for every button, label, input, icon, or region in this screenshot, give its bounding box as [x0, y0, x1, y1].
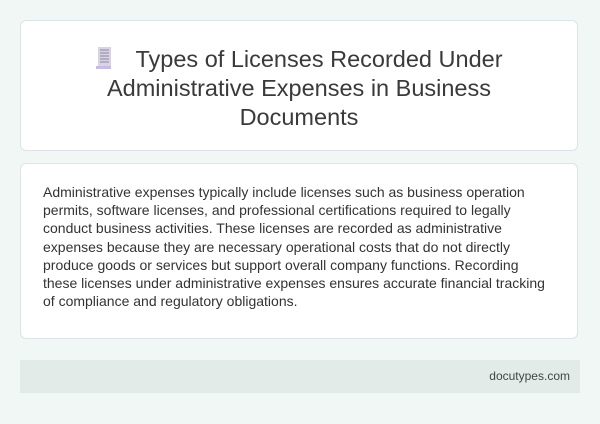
icon: document scroll	[96, 47, 111, 69]
header panel	[20, 20, 578, 151]
description panel	[20, 163, 578, 339]
footer bar	[20, 360, 580, 393]
footer source text: docutypes.com	[489, 369, 570, 383]
title: Types of Licenses Recorded Under Administrative Expenses in Business Documents	[107, 46, 503, 130]
body text: Administrative expenses typically include licenses such as business operation permits, software licenses, and professional certifications required to legally conduct business activities. These licenses are recorded as administrative expenses because they are necessary operational costs that do not directly produce goods or services but support overall company functions. Recording these licenses under administrative expenses ensures accurate financial tracking of compliance and regulatory obligations.	[43, 184, 545, 309]
